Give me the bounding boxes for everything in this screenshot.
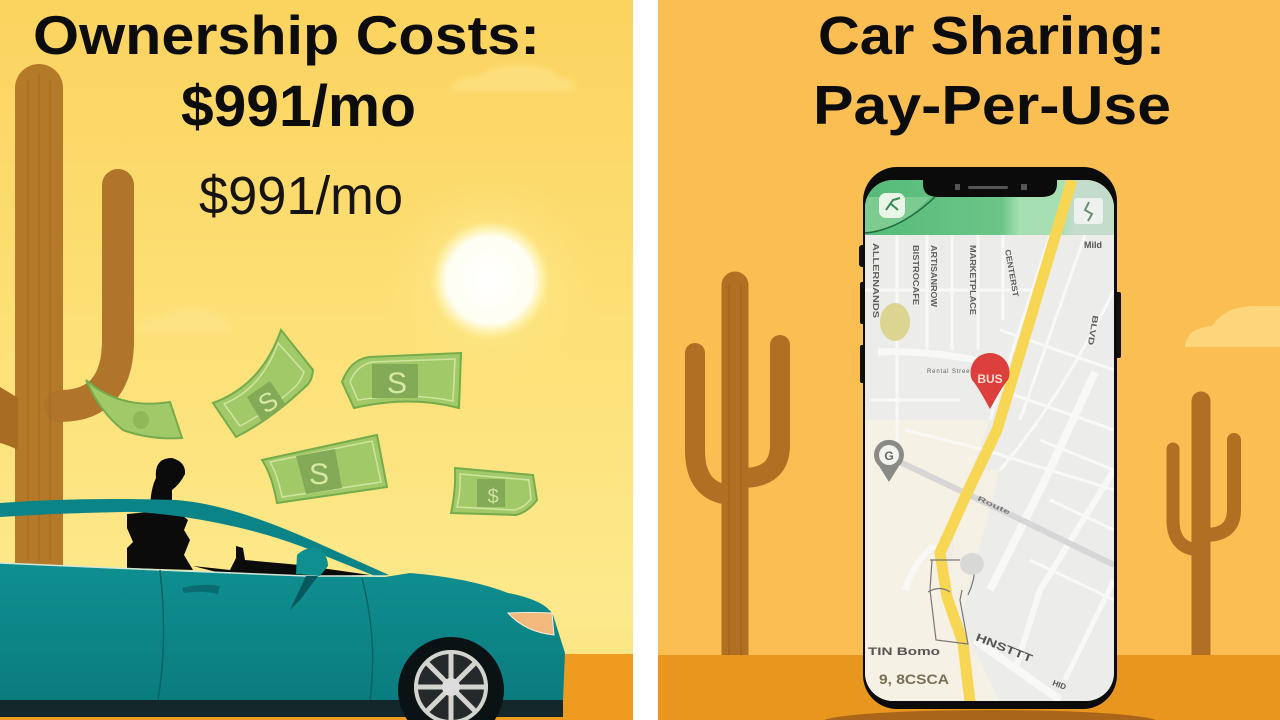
speaker xyxy=(955,184,1027,190)
map labels: BISTROCAFE xyxy=(911,245,920,306)
icon: grey location pin: G xyxy=(884,449,894,463)
map caption: 9, 8CSCA xyxy=(879,671,949,687)
ground strip xyxy=(0,717,633,720)
route labels xyxy=(868,632,1068,692)
bill 2: S xyxy=(253,385,283,419)
door seams and handle xyxy=(158,570,373,700)
panel: car sharing xyxy=(658,0,1280,720)
desert sky xyxy=(0,0,633,720)
headlight xyxy=(508,612,554,635)
green map header xyxy=(865,180,1114,235)
icon: flying dollar bills xyxy=(86,330,537,515)
map labels: MARKETPLACE xyxy=(968,245,977,316)
park area xyxy=(880,303,910,341)
icon: red location pin xyxy=(970,353,1009,409)
map streets xyxy=(865,235,1114,700)
icon: grey location pin xyxy=(874,440,904,482)
sun xyxy=(424,210,556,342)
subheading: monthly cost: $991/mo xyxy=(199,166,403,226)
bill 4: S xyxy=(309,458,329,491)
app icon right xyxy=(1074,198,1103,224)
bill 5: $ xyxy=(487,486,499,508)
route labels: TIN Bomo xyxy=(868,646,940,658)
icon: red location pin: BUS xyxy=(977,372,1003,386)
bill 3 xyxy=(342,353,461,408)
bill 5 xyxy=(451,468,537,515)
icon: smartphone xyxy=(859,167,1121,709)
side mirror xyxy=(296,548,328,576)
map labels: Route xyxy=(976,495,1011,517)
sky xyxy=(658,0,1280,720)
phone body xyxy=(863,167,1117,709)
car body xyxy=(0,564,565,700)
wheel xyxy=(398,637,504,720)
heading: car sharing: Car Sharing: xyxy=(818,6,1165,66)
app icon left xyxy=(879,193,905,218)
map labels: CENTERST xyxy=(1003,249,1020,298)
lower sill xyxy=(0,700,563,717)
window trim xyxy=(0,563,385,576)
route sketch xyxy=(928,560,975,644)
heading: pay per use: Pay-Per-Use xyxy=(813,74,1171,136)
clouds xyxy=(135,65,576,333)
map screen xyxy=(865,180,1114,702)
icon: small cactus xyxy=(1173,401,1234,660)
map labels: Rental Street xyxy=(927,369,972,375)
bill 1 xyxy=(86,380,182,438)
route labels: HNSTTT xyxy=(974,632,1034,665)
map labels: Mild xyxy=(1084,240,1102,250)
silhouette of driver xyxy=(127,458,370,578)
icon: tall cactus xyxy=(0,75,118,600)
map labels: ALLERNANDS xyxy=(871,243,880,319)
map labels: BLVD xyxy=(1086,315,1100,346)
ground xyxy=(658,655,1280,720)
ground xyxy=(563,654,633,717)
route labels: HID xyxy=(1051,678,1068,692)
map labels xyxy=(871,240,1102,517)
bill 3: S xyxy=(387,367,407,400)
panel: ownership costs xyxy=(0,0,633,720)
notch xyxy=(923,180,1057,197)
yellow main road xyxy=(940,180,1072,702)
car roof xyxy=(0,499,389,576)
map labels: ARTISANROW xyxy=(929,245,938,308)
side buttons xyxy=(859,245,1121,383)
icon: large cactus xyxy=(695,285,780,660)
door handle xyxy=(182,585,220,594)
car xyxy=(0,499,565,720)
heading: monthly cost: $991/mo xyxy=(181,74,416,139)
grey arterial road xyxy=(900,462,1114,565)
cloud xyxy=(1185,306,1280,347)
phone shadow xyxy=(822,710,1158,720)
heading: ownership costs: Ownership Costs: xyxy=(33,4,540,66)
bill 4 xyxy=(262,435,387,503)
bill 2 xyxy=(213,330,313,437)
